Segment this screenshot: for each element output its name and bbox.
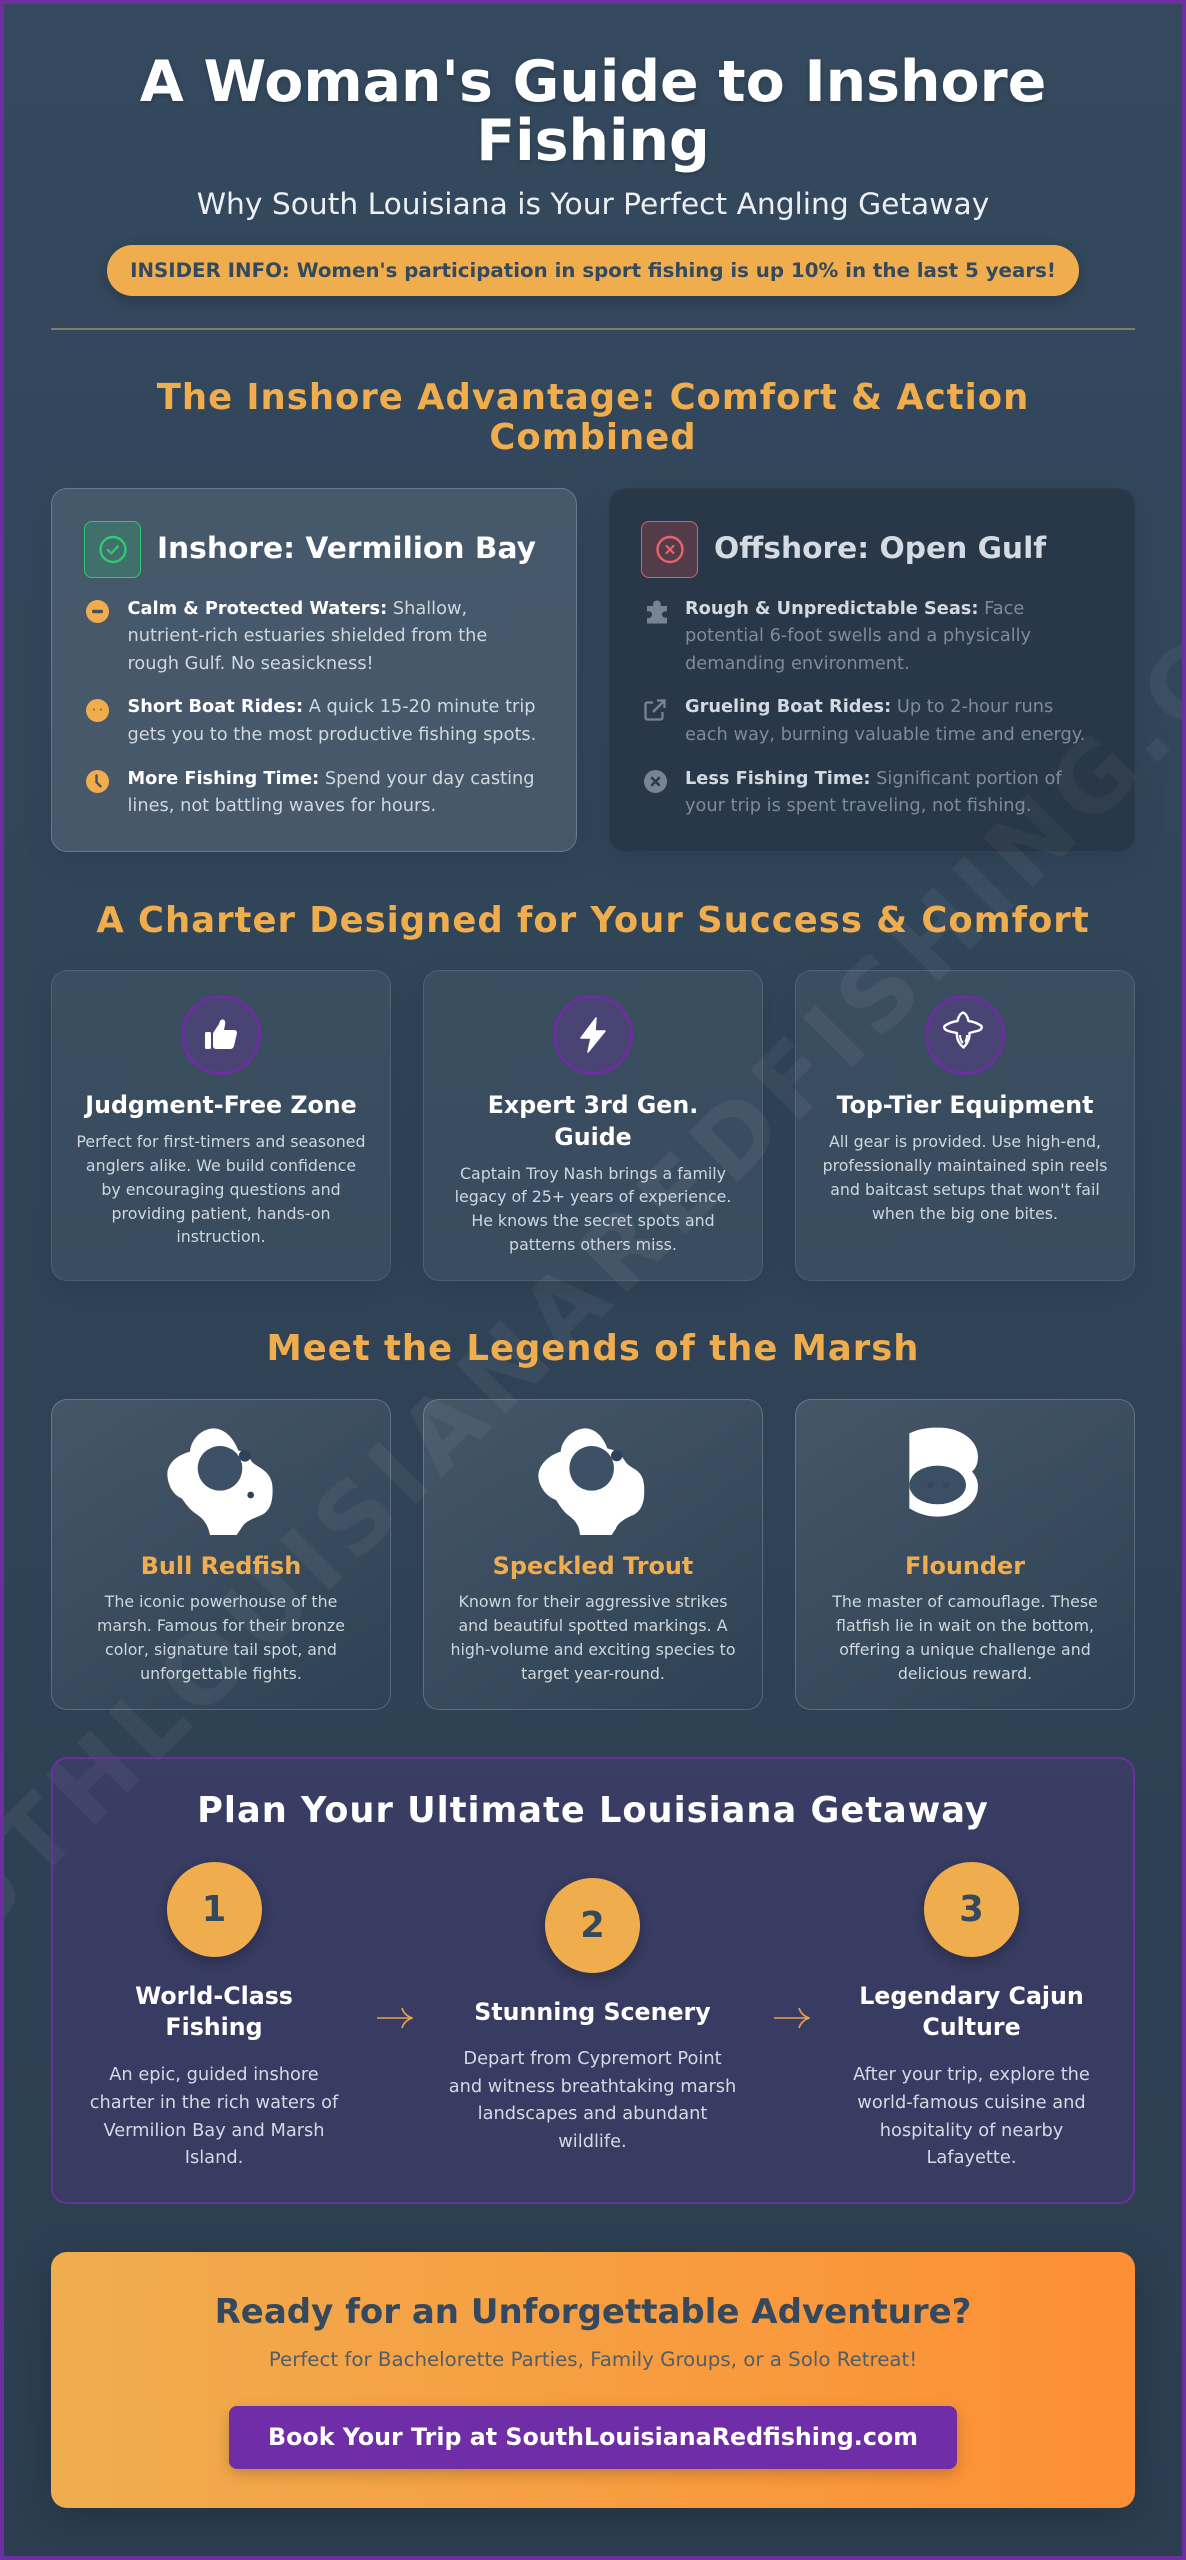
step number <box>545 1878 640 1973</box>
fish text: high-volume and exciting species to <box>450 1640 736 1659</box>
item: calm waters: Calm & Protected Waters: Shallow, <box>128 598 467 618</box>
card: speckled trout <box>423 1399 763 1710</box>
arrow 2 <box>774 2008 810 2028</box>
item: less fishing time <box>644 768 1062 816</box>
panel: plan your getaway <box>51 1757 1135 2204</box>
step 2 <box>449 1878 736 2152</box>
card text: by encouraging questions and <box>101 1180 341 1199</box>
cta text: Perfect for Bachelorette Parties, Family Groups, or a Solo Retreat! <box>269 2348 917 2371</box>
card: expert guide <box>423 970 763 1281</box>
step title <box>859 1982 1084 2041</box>
step text: hospitality of nearby <box>880 2120 1063 2141</box>
item: grueling boat rides <box>644 697 1085 745</box>
card text: legacy of 25+ years of experience. <box>455 1187 731 1206</box>
card text: Perfect for first-timers and seasoned <box>76 1132 366 1151</box>
step title: Fishing <box>165 2013 263 2041</box>
fish text: and beautiful spotted markings. A <box>458 1616 728 1635</box>
card text <box>455 1164 731 1254</box>
card: equipment <box>795 970 1135 1281</box>
step text: After your trip, explore the <box>853 2064 1090 2085</box>
item: less fishing time: Less Fishing Time: Significant portion of <box>685 768 1062 788</box>
card text: providing patient, hands-on <box>112 1204 330 1223</box>
icon: redfish <box>167 1428 273 1535</box>
step text <box>449 2048 736 2152</box>
step text <box>90 2064 339 2168</box>
insider info pill <box>107 245 1079 296</box>
fish text: color, signature tail spot, and <box>105 1640 337 1659</box>
step text: An epic, guided inshore <box>109 2064 319 2085</box>
fish text: marsh. Famous for their bronze <box>97 1616 345 1635</box>
step title: Legendary Cajun <box>859 1982 1084 2010</box>
fish text: flatfish lie in wait on the bottom, <box>836 1616 1094 1635</box>
panel: inshore <box>51 488 577 852</box>
card title: Top-Tier Equipment <box>837 1091 1093 1119</box>
step text: and witness breathtaking marsh <box>449 2076 736 2097</box>
step text: Island. <box>185 2147 243 2168</box>
item: short boat rides <box>86 697 536 745</box>
step number: 1 <box>202 1889 226 1930</box>
fish name: Flounder <box>905 1552 1025 1580</box>
item: calm waters: nutrient-rich estuaries shielded from the <box>128 626 487 646</box>
fish name: Bull Redfish <box>141 1552 301 1580</box>
fish name: Speckled Trout <box>493 1552 693 1580</box>
card text: He knows the secret spots and <box>471 1211 715 1230</box>
panel heading: Plan Your Ultimate Louisiana Getaway <box>197 1790 989 1831</box>
fish text <box>832 1592 1098 1683</box>
card text: when the big one bites. <box>872 1204 1058 1223</box>
item: calm waters <box>86 598 487 674</box>
item: rough seas: potential 6-foot swells and a physically <box>685 626 1031 646</box>
cta button: Book Your Trip at SouthLouisianaRedfishing.com <box>268 2423 918 2451</box>
icon: check circle <box>84 521 141 578</box>
icon: thumbs up <box>181 995 261 1075</box>
fish text <box>97 1592 345 1683</box>
icon: x circle <box>641 521 698 578</box>
card text: patterns others miss. <box>509 1235 677 1254</box>
title: A Woman's Guide to Inshore <box>140 49 1046 115</box>
step text: landscapes and abundant <box>478 2103 707 2124</box>
step number <box>924 1862 1019 1957</box>
step 3 <box>853 1862 1090 2168</box>
card title: Judgment-Free Zone <box>85 1091 357 1119</box>
item: rough seas: Rough & Unpredictable Seas: Face <box>685 598 1024 618</box>
arrow 1 <box>377 2008 413 2028</box>
step title: World-Class <box>135 1982 293 2010</box>
step number: 2 <box>580 1905 605 1946</box>
card title <box>488 1091 698 1151</box>
fish text: The master of camouflage. These <box>832 1592 1098 1611</box>
item: more fishing time <box>86 768 535 816</box>
icon: trout <box>538 1428 644 1535</box>
heading: inshore advantage: Combined <box>489 417 697 458</box>
fish text: delicious reward. <box>898 1664 1032 1683</box>
step text: world-famous cuisine and <box>857 2092 1086 2113</box>
heading: inshore advantage: The Inshore Advantage: Comfort & Action <box>157 377 1029 418</box>
step title: Stunning Scenery <box>474 1998 711 2026</box>
card: flounder <box>795 1399 1135 1710</box>
title <box>140 49 1046 174</box>
item: grueling boat rides: Grueling Boat Rides: Up to 2-hour runs <box>685 697 1053 717</box>
cta button <box>229 2406 957 2469</box>
step title: Culture <box>922 2013 1021 2041</box>
item: rough seas <box>647 598 1031 674</box>
card text: All gear is provided. Use high-end, <box>829 1132 1101 1151</box>
card text: anglers alike. We build confidence <box>86 1156 356 1175</box>
panel: offshore <box>609 488 1135 852</box>
item: more fishing time: lines, not battling waves for hours. <box>128 796 436 816</box>
card title: Guide <box>554 1123 632 1151</box>
heading: inshore advantage <box>156 377 1029 458</box>
fish text: Known for their aggressive strikes <box>459 1592 727 1611</box>
step number: 3 <box>959 1889 984 1930</box>
subtitle: Why South Louisiana is Your Perfect Angling Getaway <box>197 186 989 222</box>
panel: call to action <box>51 2252 1135 2508</box>
icon: lightning bolt <box>553 995 633 1075</box>
step number <box>166 1862 262 1957</box>
step title <box>135 1982 293 2041</box>
item: grueling boat rides: each way, burning valuable time and energy. <box>685 725 1085 745</box>
heading: offshore open gulf: Offshore: Open Gulf <box>714 531 1046 566</box>
step text <box>853 2064 1090 2168</box>
card text <box>76 1132 366 1246</box>
heading: legends: Meet the Legends of the Marsh <box>266 1328 920 1369</box>
step text: wildlife. <box>558 2131 627 2152</box>
card text <box>823 1132 1107 1223</box>
heading: inshore vermilion bay: Inshore: Vermilion Bay <box>157 531 536 566</box>
step 1 <box>90 1862 339 2168</box>
step text: Lafayette. <box>927 2147 1016 2168</box>
item: more fishing time: More Fishing Time: Spend your day casting <box>128 768 535 788</box>
fish text: offering a unique challenge and <box>839 1640 1091 1659</box>
step text: Vermilion Bay and Marsh <box>103 2120 325 2141</box>
insider info pill: INSIDER INFO: Women's participation in sport fishing is up 10% in the last 5 years! <box>130 259 1056 282</box>
item: short boat rides: Short Boat Rides: A quick 15-20 minute trip <box>128 697 536 717</box>
fish text <box>450 1592 736 1683</box>
card text: professionally maintained spin reels <box>823 1156 1107 1175</box>
item: less fishing time: your trip is spent traveling, not fishing. <box>685 796 1031 816</box>
item: rough seas: demanding environment. <box>685 654 910 674</box>
step text: Depart from Cypremort Point <box>463 2048 722 2069</box>
fish text: target year-round. <box>521 1664 665 1683</box>
card title: Expert 3rd Gen. <box>488 1091 698 1119</box>
title: Fishing <box>476 108 710 174</box>
card: bull redfish <box>51 1399 391 1710</box>
card text: Captain Troy Nash brings a family <box>460 1164 726 1183</box>
card text: instruction. <box>176 1227 266 1246</box>
icon: gear star <box>925 995 1005 1075</box>
card text: and baitcast setups that won't fail <box>830 1180 1100 1199</box>
cta heading: Ready for an Unforgettable Adventure? <box>215 2292 971 2332</box>
fish text: The iconic powerhouse of the <box>105 1592 337 1611</box>
fish text: unforgettable fights. <box>140 1664 302 1683</box>
step text: charter in the rich waters of <box>90 2092 338 2113</box>
heading: charter: A Charter Designed for Your Success & Comfort <box>96 900 1090 941</box>
card: judgment-free zone <box>51 970 391 1281</box>
icon: flounder <box>909 1428 978 1517</box>
item: short boat rides: gets you to the most productive fishing spots. <box>128 725 536 745</box>
item: calm waters: rough Gulf. No seasickness! <box>128 654 374 674</box>
